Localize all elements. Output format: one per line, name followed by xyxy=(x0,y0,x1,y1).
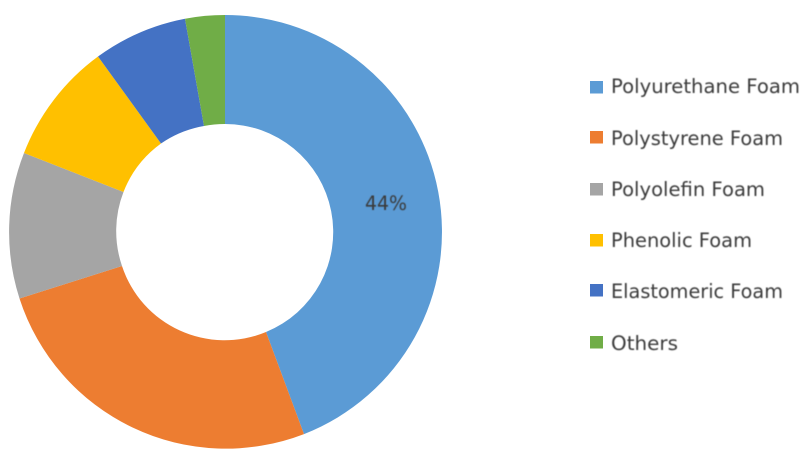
legend item: Elastomeric Foam: Elastomeric Foam xyxy=(611,280,783,303)
segment: Polyurethane Foam xyxy=(225,15,442,434)
segment: Polyolefin Foam xyxy=(9,153,123,298)
legend item: Polystyrene Foam: Polystyrene Foam xyxy=(611,127,783,150)
data label: 44%: 44% xyxy=(365,192,407,215)
legend item: Polyolefin Foam: Polyolefin Foam xyxy=(611,178,765,201)
legend xyxy=(590,75,800,355)
legend item: Phenolic Foam: Phenolic Foam xyxy=(611,229,752,252)
segment: Polystyrene Foam xyxy=(20,266,304,449)
legend item: Polyurethane Foam: Polyurethane Foam xyxy=(611,75,800,98)
segment: Elastomeric Foam xyxy=(98,19,204,144)
legend item: Others: Others xyxy=(611,332,678,355)
segment: Phenolic Foam xyxy=(24,56,161,192)
donut chart xyxy=(9,15,442,449)
segment: Others xyxy=(185,15,225,126)
